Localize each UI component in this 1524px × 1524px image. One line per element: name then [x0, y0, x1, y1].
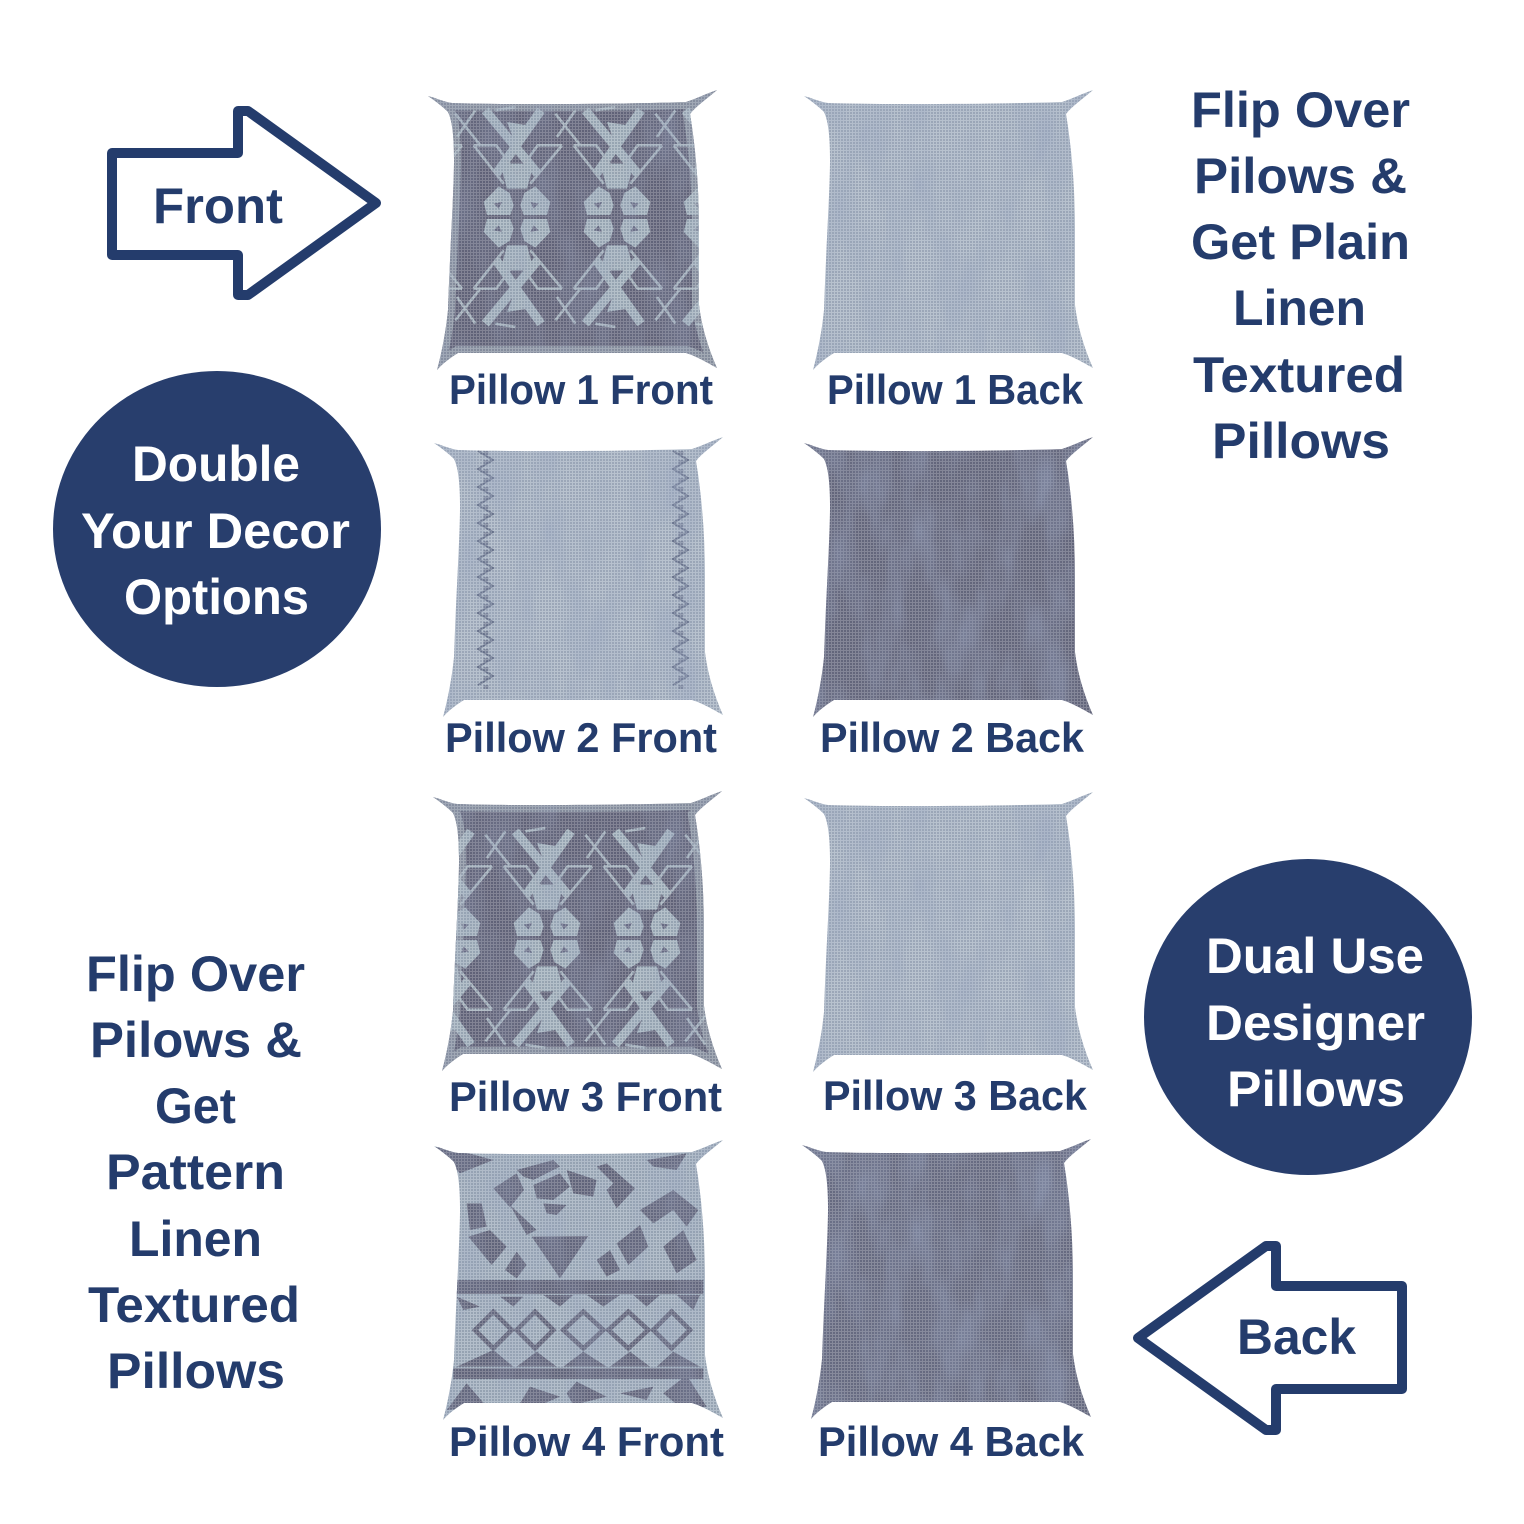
- back arrow: [1138, 1246, 1402, 1430]
- callout: double your decor options: Options: [124, 569, 309, 625]
- text: flip over pillows get pattern linen: Pillows: [107, 1343, 285, 1399]
- pillow 4 back: [802, 1139, 1092, 1420]
- callout: dual use designer pillows: Dual Use: [1206, 928, 1424, 984]
- pillow 2 front label: Pillow 2 Front: [445, 714, 717, 761]
- pillow 3 back: [804, 792, 1094, 1073]
- pillow 3 back label: Pillow 3 Back: [823, 1072, 1088, 1119]
- text: flip over pillows get pattern linen: Textured: [88, 1277, 300, 1333]
- pillow 4 front label: Pillow 4 Front: [449, 1418, 724, 1465]
- callout: dual use designer pillows: Designer: [1206, 995, 1425, 1051]
- pillow 1 front: [428, 90, 717, 370]
- pillow 2 back label: Pillow 2 Back: [820, 714, 1085, 761]
- text: flip over pillows get pattern linen: Linen: [129, 1211, 262, 1267]
- front arrow: [112, 111, 376, 295]
- text: flip over pillows get plain linen: Linen: [1233, 280, 1366, 336]
- callout: double your decor options: Double: [132, 436, 300, 492]
- pillow 4 front: [433, 1140, 724, 1421]
- pillow 3 front label: Pillow 3 Front: [449, 1073, 722, 1120]
- front arrow: Front: [153, 178, 283, 234]
- pillow 1 front label: Pillow 1 Front: [449, 366, 713, 413]
- text: flip over pillows get pattern linen: Pattern: [106, 1144, 285, 1200]
- pillow 2 front: [434, 437, 724, 718]
- callout: double your decor options: Your Decor: [81, 503, 350, 559]
- text: flip over pillows get plain linen: Pilows &: [1194, 148, 1407, 204]
- text: flip over pillows get plain linen: Textured: [1193, 347, 1405, 403]
- text: flip over pillows get pattern linen: Get: [155, 1078, 236, 1134]
- text: flip over pillows get pattern linen: Flip Over: [86, 946, 305, 1002]
- callout: dual use designer pillows: [1144, 859, 1472, 1175]
- pillow 3 front: [433, 791, 722, 1071]
- pillow 1 back label: Pillow 1 Back: [827, 366, 1084, 413]
- text: flip over pillows get plain linen: [1191, 82, 1410, 469]
- back arrow: Back: [1237, 1309, 1356, 1365]
- text: flip over pillows get plain linen: Flip Over: [1191, 82, 1410, 138]
- text: flip over pillows get pattern linen: Pilows &: [90, 1012, 302, 1068]
- text: flip over pillows get plain linen: Pillows: [1212, 413, 1390, 469]
- text: flip over pillows get pattern linen: [86, 946, 305, 1399]
- callout: double your decor options: [53, 371, 381, 687]
- pillow 2 back: [804, 437, 1094, 718]
- pillow 4 back label: Pillow 4 Back: [818, 1418, 1085, 1465]
- pillow 1 back: [804, 90, 1094, 371]
- callout: dual use designer pillows: Pillows: [1227, 1061, 1405, 1117]
- text: flip over pillows get plain linen: Get Plain: [1191, 214, 1410, 270]
